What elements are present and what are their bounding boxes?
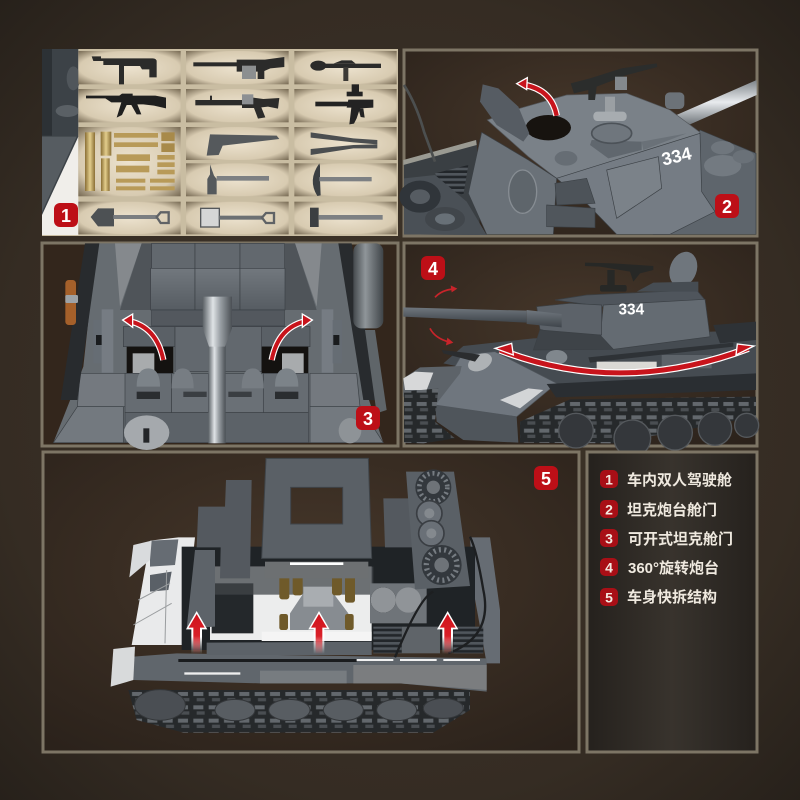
translucent side windows — [115, 243, 322, 310]
icon: belt-fed machine gun — [193, 57, 284, 79]
interior cavity — [182, 547, 475, 650]
turret hatch cover — [637, 248, 702, 292]
red arrow — [517, 78, 557, 116]
side rail with tool — [546, 343, 733, 370]
tank front illustration — [53, 243, 387, 450]
hull deck — [443, 330, 756, 385]
road wheels — [559, 412, 759, 457]
floor lip — [262, 632, 372, 641]
gun barrel — [203, 297, 232, 443]
hatch cover — [480, 84, 529, 142]
left engine deck — [399, 175, 487, 235]
hatch hinges — [93, 309, 342, 373]
small upper arrow — [435, 285, 457, 297]
icon: bolt cutters — [311, 132, 377, 155]
lower hull blocks — [53, 373, 383, 443]
panel: feature legend — [587, 452, 757, 752]
legend item 1: 车内双人驾驶舱 — [627, 471, 732, 489]
legend item 2: 2 — [605, 502, 613, 518]
icon: shovel with pointed blade — [91, 208, 169, 226]
badge 4 — [421, 256, 445, 280]
road wheels — [135, 690, 463, 721]
icon: ammunition set — [85, 132, 175, 191]
legend item 4: 4 — [605, 560, 613, 576]
engine block — [370, 583, 440, 653]
panel 3 frame and background — [42, 243, 398, 446]
panel 3: opening driver hatches — [42, 243, 398, 450]
gun barrel — [403, 307, 562, 327]
right lift arrow — [437, 611, 458, 654]
turret — [533, 290, 710, 350]
badge 5: 5 — [541, 469, 551, 489]
removable turret ring cover — [262, 458, 372, 558]
gun barrel — [675, 80, 757, 124]
red rotation arc — [495, 343, 754, 373]
icon: scoped rifle — [315, 84, 373, 124]
legend item 4 — [600, 558, 719, 577]
small lower arrow — [430, 328, 453, 345]
rear hull deck — [470, 537, 500, 663]
tank detail strip — [42, 49, 80, 235]
seats and shells — [279, 576, 355, 630]
front compartment grey block — [187, 550, 215, 628]
icon: square spade — [201, 208, 274, 227]
legend item 1: 1 — [605, 472, 613, 488]
hull front plates — [123, 327, 310, 372]
left fender and track — [403, 366, 462, 443]
panel 1: accessories and weapons — [42, 49, 398, 236]
fan deck cover — [406, 469, 470, 589]
open hatch ring — [526, 115, 571, 140]
right red arrow — [272, 314, 312, 360]
rear hull and rail — [403, 85, 480, 235]
badge 4: 4 — [428, 259, 438, 279]
disassembled tank illustration — [111, 458, 500, 733]
panel 5 frame and background — [43, 452, 579, 752]
badge 1 — [54, 203, 78, 227]
side tracks and rods — [61, 243, 387, 413]
track band — [520, 397, 756, 443]
text: 334: 334 — [619, 302, 645, 319]
white front deck — [129, 537, 195, 645]
left lift arrow — [186, 611, 207, 654]
badge 3: 3 — [363, 409, 373, 429]
engine grilles — [373, 627, 483, 653]
centre lift arrow — [308, 611, 330, 654]
left hatch opening — [127, 347, 173, 373]
orange tool — [65, 280, 78, 325]
glacis plate — [435, 350, 557, 443]
legend item 3: 可开式坦克舱门 — [628, 530, 733, 548]
turret side faces — [468, 132, 715, 234]
side rails — [178, 537, 485, 675]
side armour band — [133, 653, 487, 692]
left red arrow — [123, 314, 163, 360]
icon: sledgehammer — [310, 208, 383, 227]
badge 2: 2 — [722, 197, 732, 217]
legend item 4: 360°旋转炮台 — [628, 559, 719, 577]
text: 334: 334 — [660, 143, 693, 169]
top machine gun — [585, 263, 653, 292]
right hatch opening — [262, 347, 308, 373]
icon: submachine gun — [92, 56, 157, 84]
tracks — [128, 690, 470, 733]
removable hull cover left — [197, 480, 252, 578]
legend item 5: 5 — [605, 590, 613, 606]
legend frame and background — [587, 452, 757, 752]
panel 2 frame and background — [404, 50, 757, 236]
legend item 2: 坦克炮台舱门 — [627, 501, 717, 519]
white floor — [210, 567, 372, 640]
badge 1: 1 — [61, 206, 71, 226]
legend item 2 — [600, 500, 717, 519]
panel 4 frame and background — [404, 243, 757, 446]
hatch bumps and fittings — [124, 368, 361, 450]
icon: assault rifle — [86, 94, 166, 118]
icon: axe — [207, 164, 269, 194]
icon: saw — [207, 134, 279, 156]
turret block — [151, 243, 285, 326]
panel 2: turret hatch — [399, 50, 757, 236]
legend item 5: 车身快拆结构 — [627, 588, 717, 606]
badge 3 — [356, 406, 380, 430]
badge 2 — [715, 194, 739, 218]
panel 4: rotating turret — [403, 243, 759, 457]
removable rear cover — [383, 498, 412, 547]
right hull deck — [653, 130, 756, 234]
tank side illustration — [403, 248, 759, 457]
turret illustration — [399, 63, 757, 235]
weapon and tool tiles — [78, 51, 397, 234]
legend item 3: 3 — [605, 530, 613, 546]
side skirt — [547, 373, 756, 397]
icon: pickaxe — [313, 163, 372, 196]
icon: anti-tank rocket launcher — [310, 60, 381, 81]
panel 1 tile backing — [42, 49, 398, 236]
machine gun on mount — [571, 63, 657, 121]
periscope ring — [590, 123, 687, 158]
turret roof — [487, 93, 700, 178]
icon: general purpose machine gun — [195, 94, 279, 119]
badge 5 — [534, 466, 558, 490]
panel 5: quick-disassembly body — [43, 452, 579, 752]
